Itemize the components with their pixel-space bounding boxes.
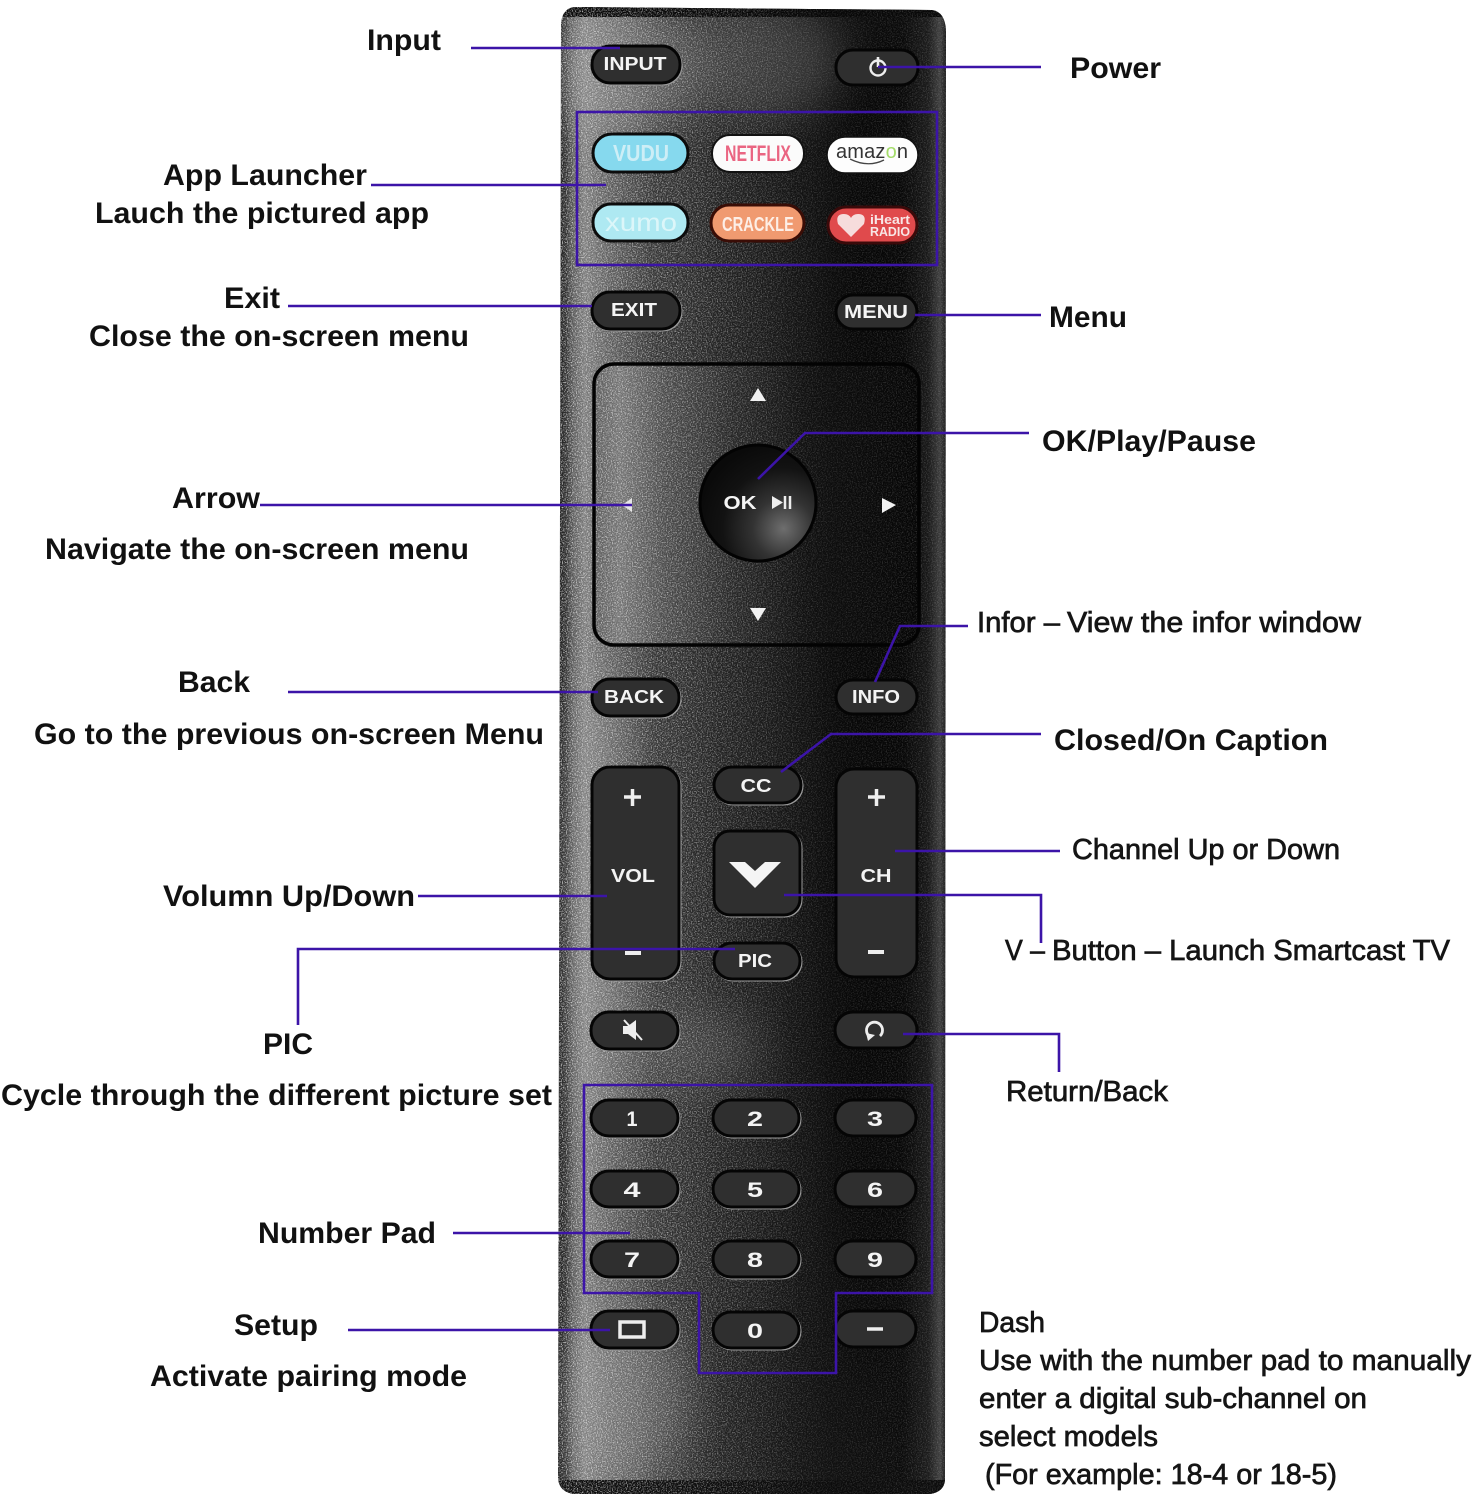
key 7 bbox=[591, 1241, 678, 1277]
label: pic bbox=[1, 1028, 552, 1112]
EXIT button bbox=[592, 292, 680, 329]
iHeart Radio button: RADIO bbox=[870, 224, 910, 239]
CRACKLE button: CRACKLE bbox=[722, 214, 794, 236]
key 4: 4 bbox=[624, 1179, 641, 1202]
label: volume: Volumn Up/Down bbox=[163, 880, 415, 913]
label: ok play pause: OK/Play/Pause bbox=[1042, 425, 1256, 458]
OK button bbox=[700, 445, 816, 561]
label: back bbox=[34, 666, 544, 751]
channel rocker: CH bbox=[860, 866, 892, 886]
INFO button bbox=[836, 680, 917, 714]
power button bbox=[836, 50, 918, 85]
directional pad bbox=[594, 364, 919, 645]
label: input: Input bbox=[367, 24, 441, 57]
BACK button bbox=[592, 679, 679, 716]
right arrow bbox=[882, 498, 896, 513]
CC button bbox=[714, 767, 801, 803]
line: info bbox=[875, 626, 968, 682]
number pad bracket bbox=[584, 1085, 932, 1373]
label: dash: Use with the number pad to manually bbox=[979, 1345, 1472, 1377]
line: exit bbox=[288, 305, 592, 307]
label: channel: Channel Up or Down bbox=[1072, 834, 1340, 866]
label: setup: Activate pairing mode bbox=[150, 1360, 467, 1393]
key 2 bbox=[713, 1100, 799, 1136]
CC button: CC bbox=[740, 776, 772, 796]
label: menu: Menu bbox=[1049, 301, 1127, 334]
label: dash: enter a digital sub-channel on bbox=[979, 1383, 1367, 1415]
channel rocker bbox=[836, 769, 917, 977]
key 3: 3 bbox=[867, 1108, 883, 1131]
line: arrow bbox=[260, 504, 632, 506]
number pad buttons bbox=[591, 1100, 916, 1348]
OK button: OK bbox=[724, 493, 757, 513]
key 8 bbox=[713, 1241, 799, 1277]
line: back bbox=[288, 691, 598, 693]
label: info: View the infor window bbox=[1067, 607, 1362, 639]
key 5: 5 bbox=[747, 1179, 763, 1202]
xumo button: xumo bbox=[605, 209, 677, 237]
line: menu bbox=[915, 314, 1041, 316]
line: channel bbox=[895, 850, 1060, 852]
left arrow bbox=[622, 498, 632, 512]
line: ok bbox=[758, 433, 1029, 479]
VUDU button: VUDU bbox=[613, 140, 669, 166]
MENU button: MENU bbox=[844, 302, 908, 322]
line: pic bbox=[298, 949, 735, 1025]
line: v button bbox=[784, 895, 1041, 943]
down arrow bbox=[750, 608, 766, 621]
remote control bbox=[550, 0, 950, 1497]
label: dash: (For example: 18-4 or 18-5) bbox=[985, 1459, 1337, 1491]
label: pic: PIC bbox=[263, 1028, 313, 1061]
label: v button: V – bbox=[1005, 935, 1046, 967]
EXIT button: EXIT bbox=[611, 300, 657, 320]
label: app launcher: Lauch the pictured app bbox=[95, 197, 429, 230]
NETFLIX button bbox=[712, 135, 804, 172]
key 9 bbox=[835, 1241, 916, 1277]
setup key bbox=[591, 1311, 678, 1348]
line: volume bbox=[418, 895, 607, 897]
app launcher buttons bbox=[593, 134, 918, 243]
label: pic: Cycle through the different picture set bbox=[1, 1079, 552, 1112]
label: arrow bbox=[45, 482, 469, 566]
label: exit bbox=[89, 282, 469, 353]
label: app launcher: App Launcher bbox=[163, 159, 367, 192]
volume rocker: VOL bbox=[611, 866, 655, 886]
label: exit: Exit bbox=[224, 282, 280, 315]
iHeart Radio button: iHeart bbox=[870, 212, 911, 227]
volume rocker bbox=[592, 767, 679, 979]
label: back: Go to the previous on-screen Menu bbox=[34, 718, 544, 751]
key 2: 2 bbox=[747, 1108, 763, 1131]
key 4 bbox=[591, 1171, 678, 1207]
key 1: 1 bbox=[626, 1108, 638, 1131]
amazon button: amazon bbox=[836, 141, 908, 163]
up arrow bbox=[750, 388, 766, 401]
key 5 bbox=[713, 1171, 799, 1207]
key 0: 0 bbox=[747, 1320, 763, 1343]
NETFLIX button: NETFLIX bbox=[725, 141, 791, 166]
xumo button bbox=[593, 204, 688, 241]
label: dash: Dash bbox=[979, 1307, 1045, 1339]
key 3 bbox=[835, 1100, 916, 1136]
label: power: Power bbox=[1070, 52, 1161, 85]
CRACKLE button bbox=[711, 205, 804, 241]
key 6 bbox=[835, 1171, 916, 1207]
label: dash: select models bbox=[979, 1421, 1158, 1453]
label: arrow: Navigate the on-screen menu bbox=[45, 533, 469, 566]
line: cc bbox=[781, 734, 1041, 772]
remote body bbox=[550, 0, 950, 1497]
VUDU button bbox=[593, 134, 688, 172]
label: back: Back bbox=[178, 666, 250, 699]
INFO button: INFO bbox=[852, 687, 900, 707]
line: return bbox=[903, 1034, 1059, 1072]
amazon button bbox=[827, 137, 918, 173]
dash key bbox=[835, 1311, 916, 1347]
line: app launcher bbox=[371, 184, 606, 186]
label: number pad: Number Pad bbox=[258, 1217, 436, 1250]
label: return: Return/Back bbox=[1006, 1076, 1169, 1108]
label: closed caption: Closed/On Caption bbox=[1054, 724, 1328, 757]
label: v button: Button – Launch Smartcast TV bbox=[1052, 935, 1451, 967]
PIC button bbox=[714, 943, 800, 979]
line: number pad bbox=[453, 1232, 630, 1234]
iHeart Radio button bbox=[828, 207, 917, 243]
key 6: 6 bbox=[867, 1179, 883, 1202]
label: dash bbox=[979, 1307, 1472, 1491]
BACK button: BACK bbox=[604, 687, 664, 707]
line: power bbox=[878, 66, 1041, 68]
line: setup bbox=[348, 1329, 610, 1331]
key 0 bbox=[713, 1312, 799, 1348]
line: input bbox=[471, 47, 620, 49]
PIC button: PIC bbox=[738, 951, 772, 971]
key 9: 9 bbox=[867, 1249, 883, 1272]
label: info: Infor – bbox=[977, 607, 1061, 639]
MENU button bbox=[836, 295, 917, 329]
label: arrow: Arrow bbox=[172, 482, 261, 515]
INPUT button bbox=[592, 46, 680, 83]
mute button bbox=[591, 1012, 678, 1049]
app launcher bracket bbox=[577, 112, 937, 265]
INPUT button: INPUT bbox=[604, 54, 667, 74]
return button bbox=[835, 1012, 917, 1048]
label: app launcher bbox=[95, 159, 429, 230]
label: exit: Close the on-screen menu bbox=[89, 320, 469, 353]
key 1 bbox=[591, 1100, 678, 1136]
label: setup: Setup bbox=[234, 1309, 318, 1342]
leader lines and brackets bbox=[260, 48, 1060, 1373]
key 8: 8 bbox=[747, 1249, 763, 1272]
key 7: 7 bbox=[624, 1249, 640, 1272]
V button bbox=[714, 831, 800, 915]
label: setup bbox=[150, 1309, 467, 1393]
